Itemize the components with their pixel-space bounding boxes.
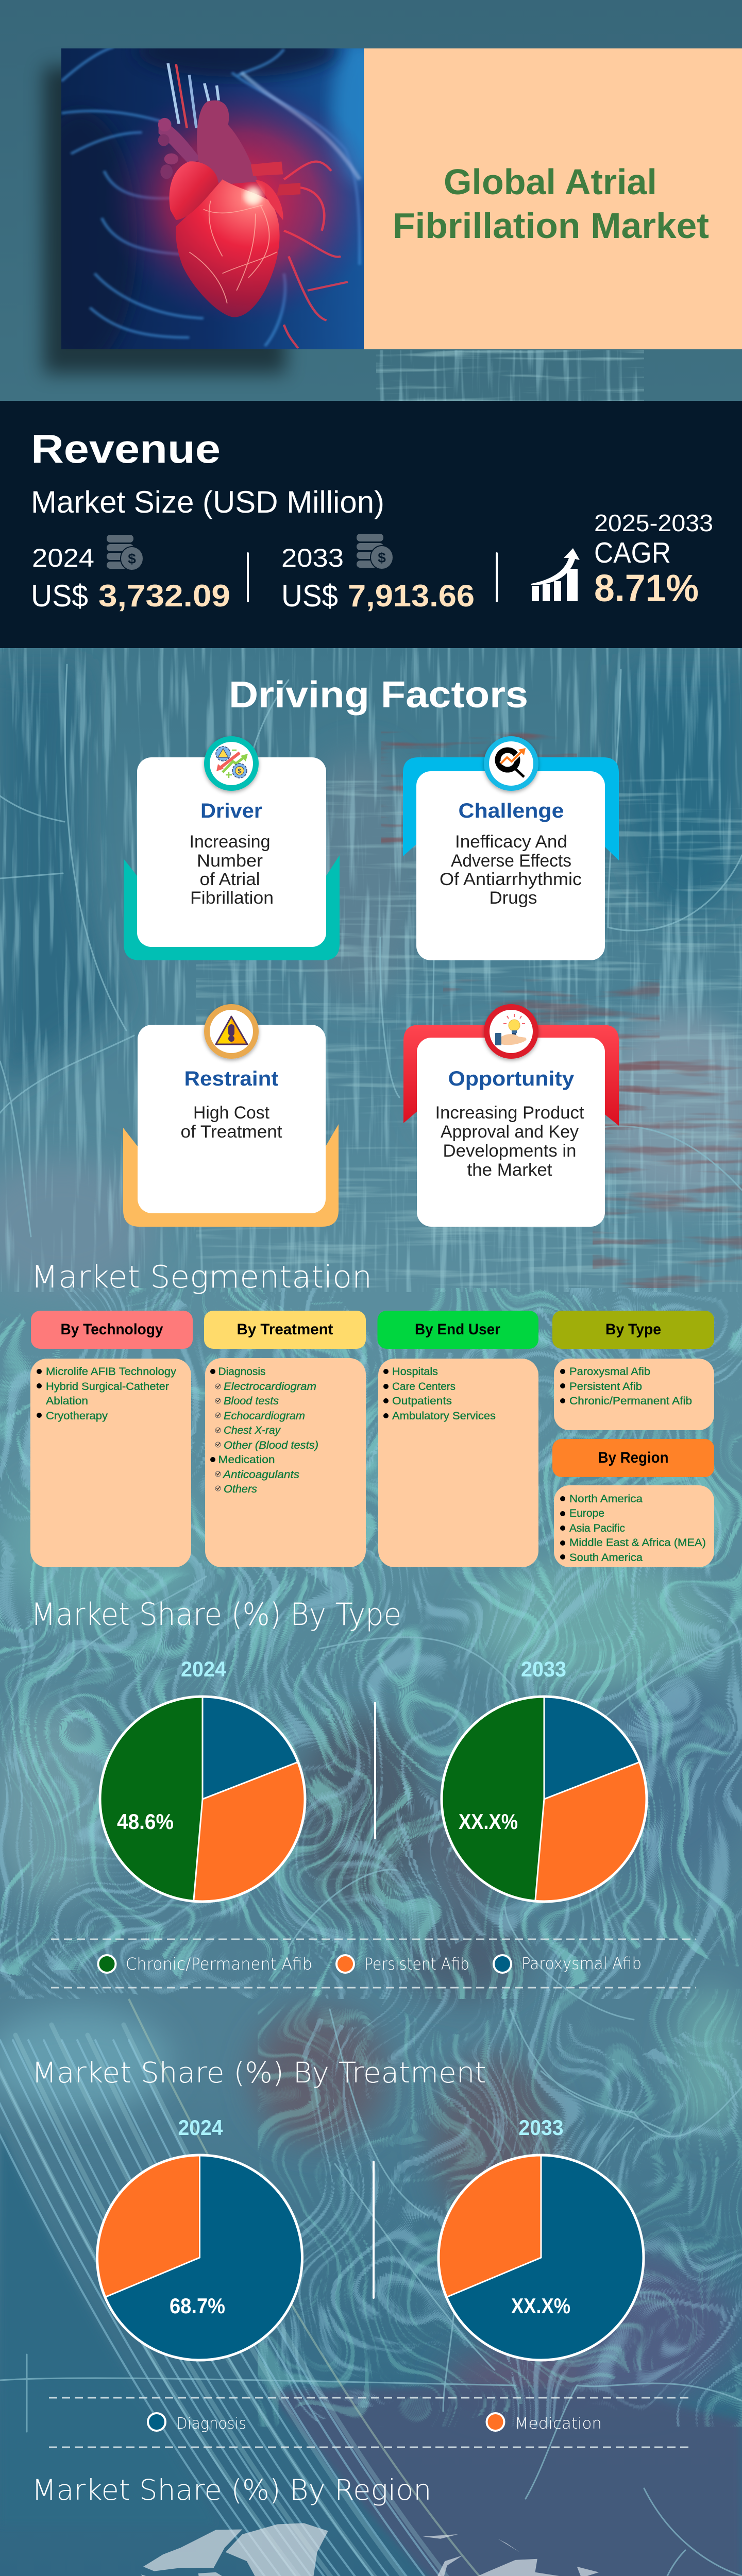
panel: by technology: Hybrid Surgical-Catheter — [46, 1381, 169, 1393]
panel: by treatment: Anticoagulants — [222, 1469, 300, 1481]
text: High Cost — [193, 1103, 270, 1123]
panel: by end user: By End User — [415, 1321, 500, 1338]
title panel — [364, 48, 742, 349]
text: Inefficacy And — [455, 832, 567, 852]
chart: treatment 2033 pie — [439, 2115, 644, 2360]
icon: driver: $ — [238, 767, 242, 775]
chart: treatment 2024 pie: 68.7% — [170, 2294, 225, 2318]
panel: by region: Europe — [569, 1507, 604, 1519]
panel: by technology: Cryotherapy — [46, 1410, 108, 1422]
CAGR: 2025-2033 — [594, 510, 713, 536]
text — [440, 832, 582, 908]
chart: type 2033 pie: XX.X% — [459, 1809, 518, 1834]
text: Approval and Key — [441, 1122, 579, 1142]
legend: type: Paroxysmal Afib — [521, 1954, 642, 1973]
panel: by treatment: Chest X-ray — [224, 1425, 281, 1436]
hero image: heart — [33, 48, 364, 384]
panel: by treatment: Others — [224, 1483, 258, 1495]
chart: treatment 2024 pie — [97, 2115, 302, 2360]
chart: type 2024 pie: 48.6% — [117, 1809, 174, 1834]
CAGR: CAGR — [594, 536, 671, 569]
icon: restraint — [204, 1004, 259, 1059]
text: of Treatment — [180, 1122, 282, 1142]
legend: treatment: Diagnosis — [176, 2415, 246, 2433]
chart: type 2033 pie: 2033 — [521, 1657, 566, 1681]
dark wedge lower left — [0, 2128, 216, 2524]
legend: treatment: Medication — [515, 2415, 602, 2433]
panel: by type: Chronic/Permanent Afib — [569, 1395, 692, 1407]
panel: by treatment: Electrocardiogram — [224, 1381, 316, 1393]
world map — [71, 2523, 665, 2576]
CAGR: 8.71% — [594, 567, 699, 609]
chart: type 2024 pie: 2024 — [181, 1657, 227, 1681]
panel: by type — [552, 1311, 714, 1430]
card: driver — [124, 736, 340, 960]
text: Increasing — [190, 832, 270, 852]
panel: by type: Persistent Afib — [569, 1381, 642, 1393]
chart: type 2024 pie — [100, 1657, 305, 1902]
2024 value: 2024 — [32, 544, 94, 572]
heading: market segmentation: Market Segmentation — [31, 1259, 372, 1295]
icon: opportunity — [484, 1004, 538, 1059]
panel: by treatment: Diagnosis — [218, 1366, 266, 1378]
heading: Driver — [200, 800, 262, 822]
text: Fibrillation — [190, 888, 274, 908]
revenue heading: Revenue — [31, 426, 221, 471]
text — [435, 1103, 584, 1180]
market size label: Market Size (USD Million) — [31, 485, 384, 519]
2024 value: 3,732.09 — [98, 579, 230, 613]
text: the Market — [467, 1160, 552, 1180]
legend: type: Chronic/Permanent Afib — [126, 1954, 312, 1974]
panel: by treatment: Medication — [218, 1454, 275, 1466]
panel: by technology: Ablation — [46, 1395, 88, 1407]
2024 value — [31, 535, 230, 613]
panel: by end user — [377, 1311, 538, 1567]
revenue band — [0, 401, 742, 648]
title text: Global Atrial — [444, 162, 657, 202]
legend: type: Persistent Afib — [364, 1954, 469, 1974]
heading: Opportunity — [448, 1067, 575, 1090]
2024 value: US$ — [31, 579, 88, 613]
panel: by region: By Region — [598, 1449, 669, 1466]
panel: by technology: By Technology — [61, 1321, 163, 1338]
panel: by end user: Ambulatory Services — [392, 1410, 496, 1422]
text: Of Antiarrhythmic — [440, 870, 582, 889]
heading: Restraint — [184, 1067, 278, 1090]
panel: by treatment: Blood tests — [224, 1395, 279, 1407]
chart: treatment 2033 pie: XX.X% — [511, 2294, 570, 2318]
chart: treatment 2033 pie: 2033 — [518, 2115, 564, 2140]
heading: market share by type: Market Share (%) By Type — [31, 1597, 401, 1633]
panel: by end user: Care Centers — [392, 1381, 456, 1393]
text: Developments in — [443, 1141, 576, 1161]
panel: by end user: Hospitals — [392, 1366, 438, 1378]
panel: by region: South America — [569, 1552, 643, 1564]
title text: Fibrillation Market — [393, 206, 709, 246]
panel: by region: Asia Pacific — [569, 1522, 625, 1534]
text — [180, 1103, 282, 1142]
legend: treatment — [148, 2413, 602, 2433]
text: Number — [197, 851, 263, 871]
dark purple field — [268, 2385, 742, 2576]
2033 value: 7,913.66 — [348, 579, 475, 613]
2024 value: $ — [128, 551, 136, 567]
panel: by region: Middle East & Africa (MEA) — [569, 1537, 706, 1549]
2033 value: US$ — [281, 579, 338, 613]
panel: by end user: Outpatients — [392, 1395, 452, 1407]
panel: by type: Paroxysmal Afib — [569, 1366, 650, 1378]
card: challenge — [403, 736, 619, 960]
CAGR — [594, 510, 713, 609]
panel: by treatment: Other (Blood tests) — [224, 1439, 318, 1451]
icon: driver — [204, 736, 259, 791]
panel: by region: North America — [569, 1493, 643, 1505]
2033 value: $ — [378, 550, 386, 566]
text: Adverse Effects — [451, 851, 571, 871]
text: Increasing Product — [435, 1103, 584, 1123]
icon: growth chart — [531, 548, 580, 601]
text — [190, 832, 274, 908]
panel: by treatment: By Treatment — [237, 1321, 333, 1338]
title text — [393, 162, 709, 246]
heading: Challenge — [459, 800, 564, 822]
heading: driving factors: Driving Factors — [229, 674, 528, 716]
panel: by type: By Type — [605, 1321, 661, 1338]
panel: by treatment — [204, 1311, 366, 1567]
panel: by technology — [30, 1311, 193, 1567]
icon: challenge — [484, 736, 538, 791]
2033 value — [281, 534, 475, 613]
2033 value: 2033 — [281, 544, 344, 572]
chart: treatment 2024 pie: 2024 — [178, 2115, 223, 2140]
text: Drugs — [490, 888, 537, 908]
text: of Atrial — [200, 870, 260, 889]
chart: type 2033 pie — [442, 1657, 647, 1902]
legend: type — [98, 1954, 642, 1974]
panel: by treatment: Echocardiogram — [224, 1410, 305, 1422]
heading: market share by treatment: Market Share (%) By Treatment — [32, 2056, 486, 2089]
panel: by technology: Microlife AFIB Technology — [46, 1366, 177, 1378]
panel: by region — [552, 1439, 714, 1567]
heading: market share by region: Market Share (%) By Region — [32, 2473, 432, 2506]
card: opportunity — [403, 1004, 619, 1227]
card: restraint — [123, 1004, 339, 1227]
